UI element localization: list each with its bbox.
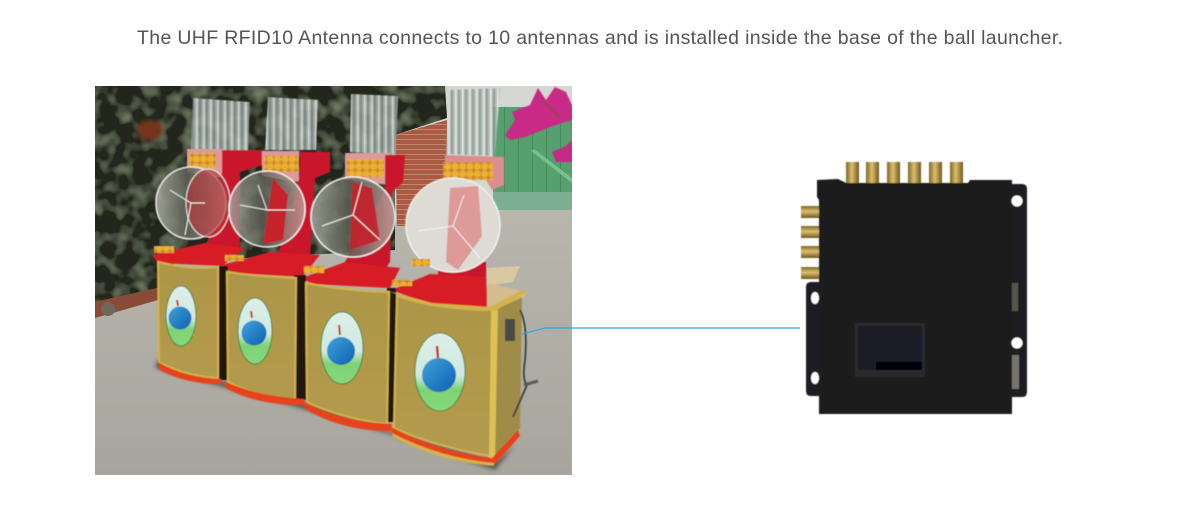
logo badge bbox=[321, 312, 363, 384]
cabinet 4 bbox=[388, 290, 538, 466]
photo background: garden and ground bbox=[95, 86, 572, 475]
cabinet 2 bbox=[224, 272, 304, 405]
back table bbox=[487, 266, 520, 286]
photo: ball launcher machines bbox=[95, 86, 572, 475]
side ports bbox=[1012, 283, 1019, 389]
launcher 4 bbox=[392, 88, 527, 309]
mounting holes bbox=[811, 196, 1022, 384]
brick planter edge bbox=[95, 288, 158, 318]
logo badge bbox=[415, 333, 465, 411]
drum bbox=[156, 167, 226, 239]
cabinet gaps bbox=[216, 266, 396, 422]
launcher 3 bbox=[302, 94, 405, 288]
green fence bbox=[493, 107, 572, 193]
device: UHF RFID10 reader bbox=[801, 162, 1027, 414]
left antenna connectors bbox=[801, 206, 822, 279]
title: The UHF RFID10 Antenna connects to 10 antennas and is installed inside the base of the ball launcher. bbox=[137, 27, 1063, 49]
right mounting ear bbox=[1005, 184, 1027, 397]
red column bbox=[206, 149, 263, 248]
display window bbox=[855, 323, 925, 377]
top antenna connectors bbox=[846, 162, 963, 183]
cabinet 1 bbox=[158, 262, 221, 384]
cabinet 3 bbox=[302, 283, 392, 431]
launcher 1 bbox=[152, 98, 262, 266]
red top bbox=[152, 243, 245, 266]
brick wall bbox=[395, 120, 447, 226]
coin slot and power cable bbox=[505, 310, 538, 417]
acrylic tubes bbox=[191, 98, 250, 152]
connector line bbox=[522, 328, 800, 334]
reader body bbox=[817, 179, 1012, 414]
foliage bbox=[95, 86, 447, 302]
cabinet shadows bbox=[155, 360, 515, 470]
logo badge bbox=[238, 298, 272, 364]
ball rack panel bbox=[187, 149, 222, 178]
flower bbox=[505, 87, 572, 162]
logo badge bbox=[166, 286, 196, 346]
left mounting ear bbox=[806, 282, 825, 396]
launcher 2 bbox=[222, 97, 330, 277]
